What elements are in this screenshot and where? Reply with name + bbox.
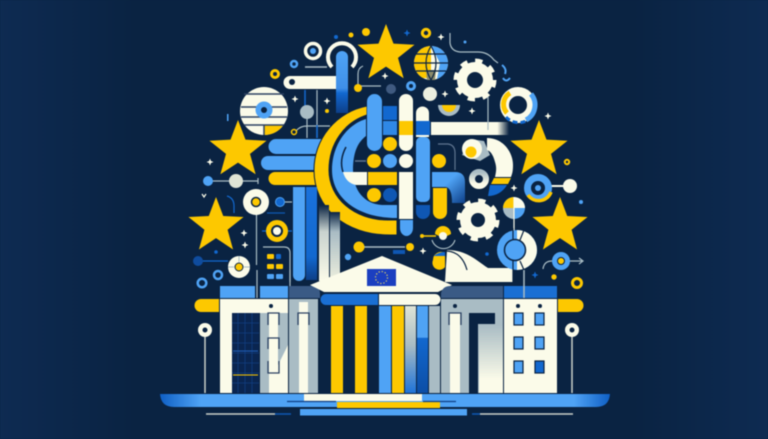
short gray dash xyxy=(355,160,366,162)
left horizontal pills xyxy=(261,139,325,185)
cream and blue tall pill xyxy=(416,107,430,219)
curved wire xyxy=(438,144,455,170)
corner wire xyxy=(263,247,290,282)
middle row xyxy=(343,172,413,236)
left vertical bars xyxy=(293,187,340,281)
star: right upper xyxy=(510,120,568,174)
blue square stack xyxy=(383,106,397,135)
small sparkles xyxy=(202,158,248,254)
icon: yellow sensor xyxy=(420,226,455,249)
right middle cluster xyxy=(345,138,583,288)
icon: blue ring with line xyxy=(291,61,327,67)
large c arc xyxy=(487,138,513,196)
central emblem xyxy=(314,94,509,236)
icon: gear lower xyxy=(460,202,496,238)
icon: cream ring xyxy=(243,189,269,265)
star: right lower xyxy=(532,197,588,249)
cream connector pill xyxy=(284,76,336,89)
icon: arrow ring xyxy=(543,252,583,270)
pediment xyxy=(310,256,452,292)
star: left upper xyxy=(209,120,267,174)
cream pill with yellow square xyxy=(399,94,413,151)
dots grid xyxy=(367,137,446,202)
vertical wire xyxy=(487,97,489,130)
small circles xyxy=(408,82,437,101)
left wing xyxy=(195,270,320,393)
icon: pie xyxy=(503,197,525,240)
icon: gray ring xyxy=(472,172,486,186)
icon: cream ring xyxy=(306,44,320,58)
top left cluster xyxy=(227,28,396,138)
icon: yellow ring xyxy=(262,222,292,240)
icon: bowl xyxy=(438,105,460,116)
icon: donut chart with node xyxy=(528,178,577,201)
curved wire xyxy=(450,33,498,63)
entablature xyxy=(320,294,440,305)
star: left lower xyxy=(188,197,244,249)
blue vertical pill xyxy=(367,94,382,151)
top pipe with ring xyxy=(328,43,356,113)
blue rings xyxy=(198,271,222,287)
small dots xyxy=(485,252,582,288)
yellow small node xyxy=(292,130,296,134)
icon: target xyxy=(228,256,250,278)
wire ends xyxy=(502,65,510,80)
small pills xyxy=(267,254,283,279)
connector lines xyxy=(296,90,330,138)
blue right block xyxy=(432,172,465,203)
building complex xyxy=(195,256,584,393)
inner curved line xyxy=(342,147,346,172)
cream horizontal bar xyxy=(431,122,509,135)
yellow vertical pill xyxy=(433,188,447,219)
blue lines xyxy=(305,90,317,138)
small bent wire xyxy=(227,196,234,213)
right wing xyxy=(441,270,584,393)
yellow ring xyxy=(314,106,397,235)
icon: yellow ring xyxy=(272,70,278,78)
small dots xyxy=(227,28,370,121)
connector pill xyxy=(354,242,414,254)
node line xyxy=(203,174,258,188)
left middle cluster xyxy=(193,158,292,287)
top right cluster xyxy=(404,29,552,130)
icon: gear top xyxy=(456,62,494,98)
connector above center xyxy=(354,66,396,94)
columns xyxy=(319,306,441,393)
small sparkles xyxy=(404,30,552,120)
icon: striped disk xyxy=(240,87,288,135)
icon: large dial xyxy=(497,228,537,285)
lamp posts xyxy=(198,323,579,393)
yellow half dot xyxy=(432,252,445,270)
small accents xyxy=(345,248,426,260)
gray node xyxy=(300,105,314,119)
cream swoosh xyxy=(445,250,513,282)
eu flag xyxy=(367,269,396,286)
icon: yellow ring xyxy=(422,29,430,37)
central temple xyxy=(310,256,452,393)
small gear and dots xyxy=(510,160,583,204)
icon: orb xyxy=(462,139,490,161)
swoosh arc xyxy=(447,251,467,270)
icon: ring segments xyxy=(504,92,535,123)
icon: globe xyxy=(414,46,448,80)
icon: blue node xyxy=(267,198,292,213)
base platform xyxy=(160,394,610,416)
star: top xyxy=(357,24,415,78)
blue inner ring xyxy=(332,119,397,218)
dark node line xyxy=(193,256,228,266)
